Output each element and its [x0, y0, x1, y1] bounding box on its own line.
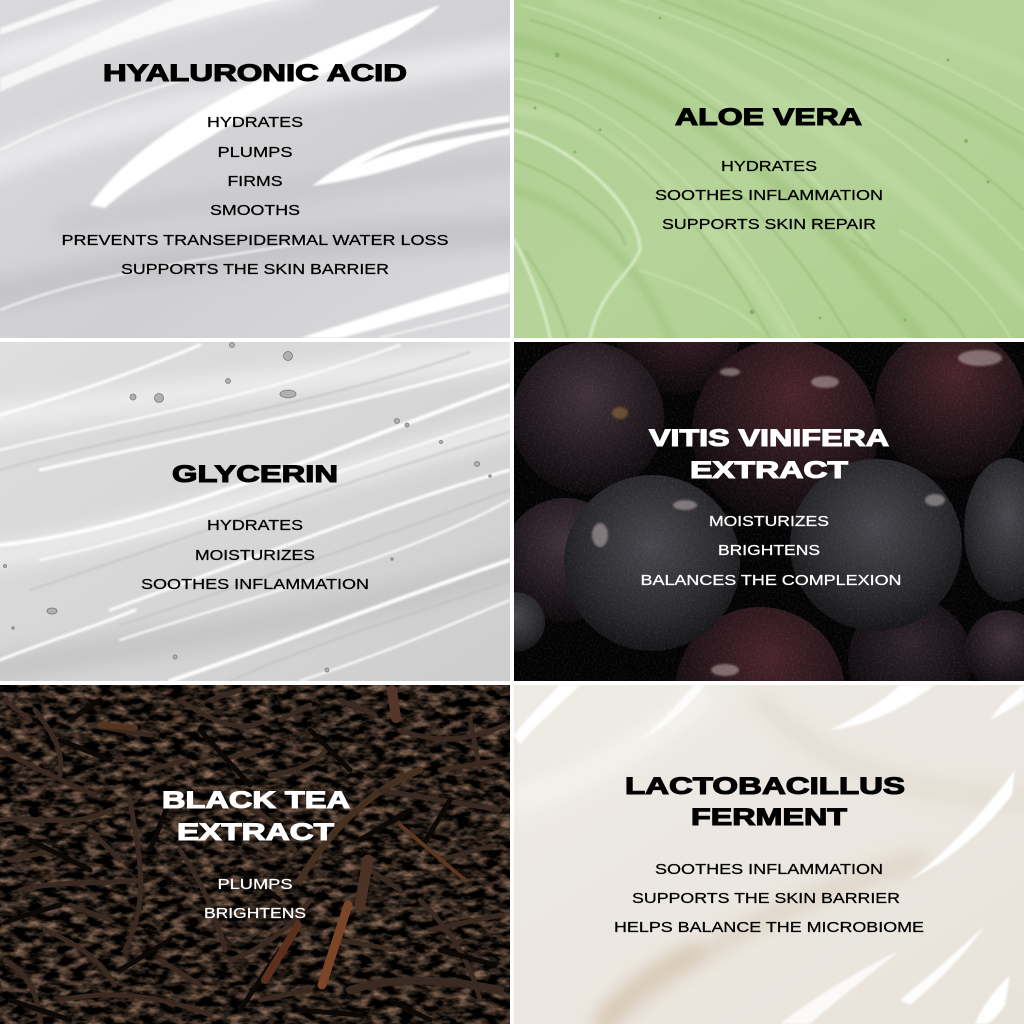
benefits list: MOISTURIZES — [195, 547, 315, 564]
heading: BLACK TEA — [162, 787, 350, 814]
texture: clear gel swatch — [0, 342, 530, 681]
benefits list — [655, 158, 883, 233]
benefits list — [614, 861, 924, 936]
benefits list: FIRMS — [228, 173, 282, 190]
heading: VITIS VINIFERA — [649, 425, 889, 452]
benefits list: PLUMPS — [218, 876, 292, 893]
heading: HYALURONIC ACID — [103, 60, 407, 87]
benefits list: SUPPORTS THE SKIN BARRIER — [121, 261, 389, 278]
benefits list — [204, 876, 306, 922]
benefits list: MOISTURIZES — [709, 513, 829, 530]
heading: LACTOBACILLUS — [625, 773, 905, 800]
panel: lactobacillus ferment — [514, 685, 1024, 1024]
panel: vitis vinifera extract — [514, 342, 1024, 681]
heading: GLYCERIN — [172, 461, 338, 488]
benefits list: BRIGHTENS — [204, 905, 306, 922]
heading: ALOE VERA — [675, 104, 862, 131]
heading — [625, 773, 905, 831]
heading: EXTRACT — [690, 457, 848, 484]
benefits list: SOOTHES INFLAMMATION — [655, 187, 883, 204]
benefits list: SMOOTHS — [210, 202, 300, 219]
benefits list: BALANCES THE COMPLEXION — [640, 572, 902, 589]
benefits list: SOOTHES INFLAMMATION — [655, 861, 883, 878]
benefits list: SOOTHES INFLAMMATION — [141, 576, 369, 593]
benefits list: SUPPORTS THE SKIN BARRIER — [632, 890, 900, 907]
benefits list — [640, 513, 902, 589]
benefits list: BRIGHTENS — [718, 542, 820, 559]
texture: cream swatch — [514, 685, 1024, 1024]
benefits list: HYDRATES — [721, 158, 817, 175]
benefits list — [141, 517, 369, 593]
texture: green gel swatch — [514, 0, 1024, 338]
panel: black tea extract — [0, 685, 510, 1024]
benefits list: PREVENTS TRANSEPIDERMAL WATER LOSS — [62, 232, 448, 249]
heading: EXTRACT — [177, 819, 334, 846]
panel: glycerin — [0, 342, 510, 681]
panel: hyaluronic acid — [0, 0, 510, 338]
benefits list — [62, 114, 448, 278]
benefits list: HYDRATES — [207, 517, 303, 534]
benefits list: HELPS BALANCE THE MICROBIOME — [614, 919, 924, 936]
texture: dark grapes — [485, 270, 1024, 777]
benefits list: HYDRATES — [207, 114, 303, 131]
heading: FERMENT — [691, 804, 847, 831]
heading — [649, 425, 889, 484]
heading — [162, 787, 350, 846]
panel: aloe vera — [514, 0, 1024, 338]
benefits list: PLUMPS — [218, 144, 292, 161]
texture: white gel swatch — [0, 0, 530, 338]
texture: black tea leaves — [0, 685, 510, 1024]
benefits list: SUPPORTS SKIN REPAIR — [662, 216, 876, 233]
